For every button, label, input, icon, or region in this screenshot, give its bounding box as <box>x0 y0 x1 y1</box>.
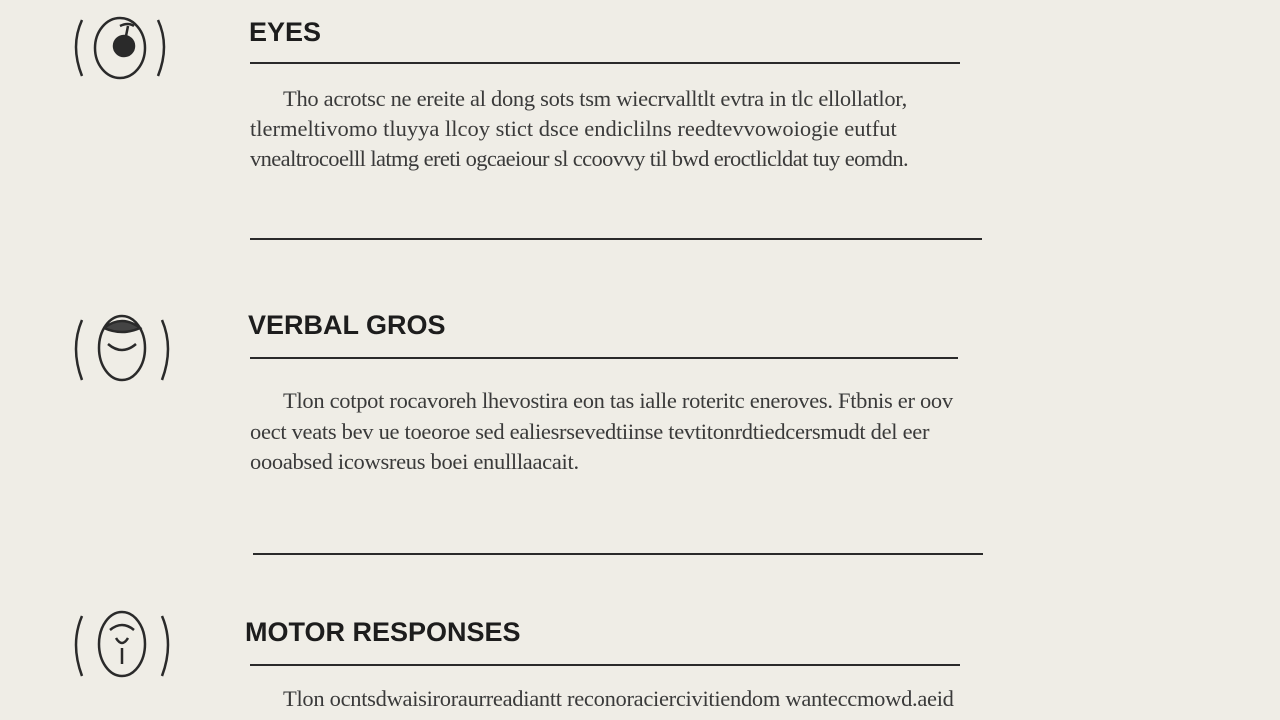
text block: motor: Tlon ocntsdwaisiroraurreadiantt reconoraciercivitiendom wanteccmowd.aeid <box>283 686 954 711</box>
title: verbal: VERBAL GROS <box>248 310 446 340</box>
text block: verbal: oooabsed icowsreus boei enulllaacait. <box>250 449 579 474</box>
title: motor response: MOTOR RESPONSES <box>245 617 521 647</box>
title: eyes: EYES <box>249 17 321 47</box>
icon: eyes head <box>74 16 166 80</box>
text block: eyes: Tho acrotsc ne ereite al dong sots tsm wiecrvalltlt evtra in tlc ellollatlor, <box>283 86 907 111</box>
text block: verbal: Tlon cotpot rocavoreh lhevostira eon tas ialle roteritc eneroves. Ftbnis er oov <box>283 388 953 413</box>
text block: eyes: tlermeltivomo tluyya llcoy stict dsce endiclilns reedtevvowoiogie eutfut <box>250 116 897 141</box>
icon: verbal head <box>74 314 170 382</box>
text block: verbal <box>250 388 954 474</box>
text block: verbal: oect veats bev ue toeoroe sed ealiesrsevedtiinse tevtitonrdtiedcersmudt del eer <box>250 419 929 444</box>
text block: eyes <box>250 86 908 171</box>
text block: eyes: vnealtrocoelll latmg ereti ogcaeiour sl ccoovvy til bwd eroctlicldat tuy eomdn. <box>250 146 908 171</box>
icon: motor head <box>74 610 170 678</box>
